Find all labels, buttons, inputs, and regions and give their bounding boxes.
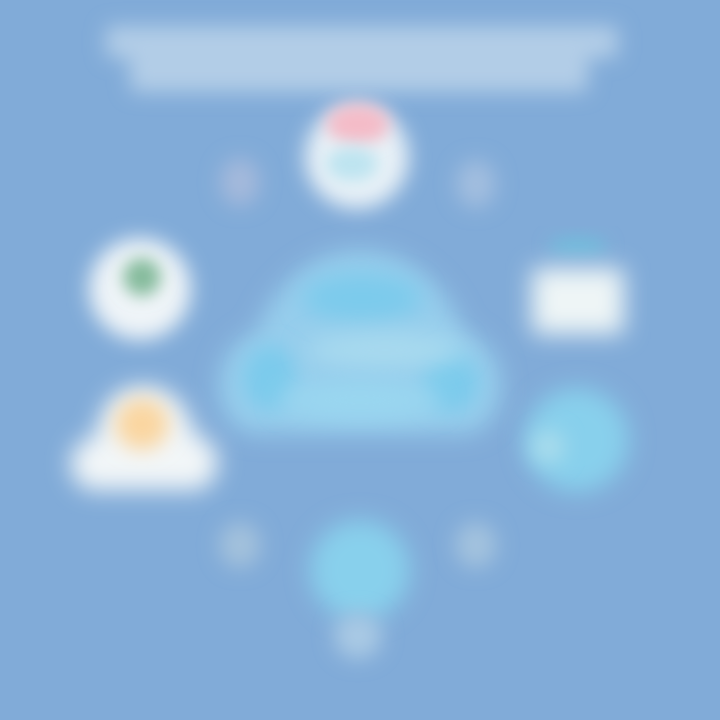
icon: top circle, pink and aqua (305, 104, 409, 209)
icon: left circle, green (89, 238, 191, 340)
central cloud (218, 250, 502, 434)
small dot: lower left (219, 522, 261, 568)
icon: lower left cloud, orange (71, 386, 218, 490)
small dot: upper right (456, 160, 496, 208)
small dot: upper left (220, 158, 260, 206)
title (illegible in reference) (106, 26, 618, 92)
icon: bottom aqua bulb (310, 520, 410, 659)
small dot: lower right (455, 522, 497, 568)
icon: lower right aqua circle (525, 388, 629, 492)
icon: right window card (532, 237, 624, 334)
